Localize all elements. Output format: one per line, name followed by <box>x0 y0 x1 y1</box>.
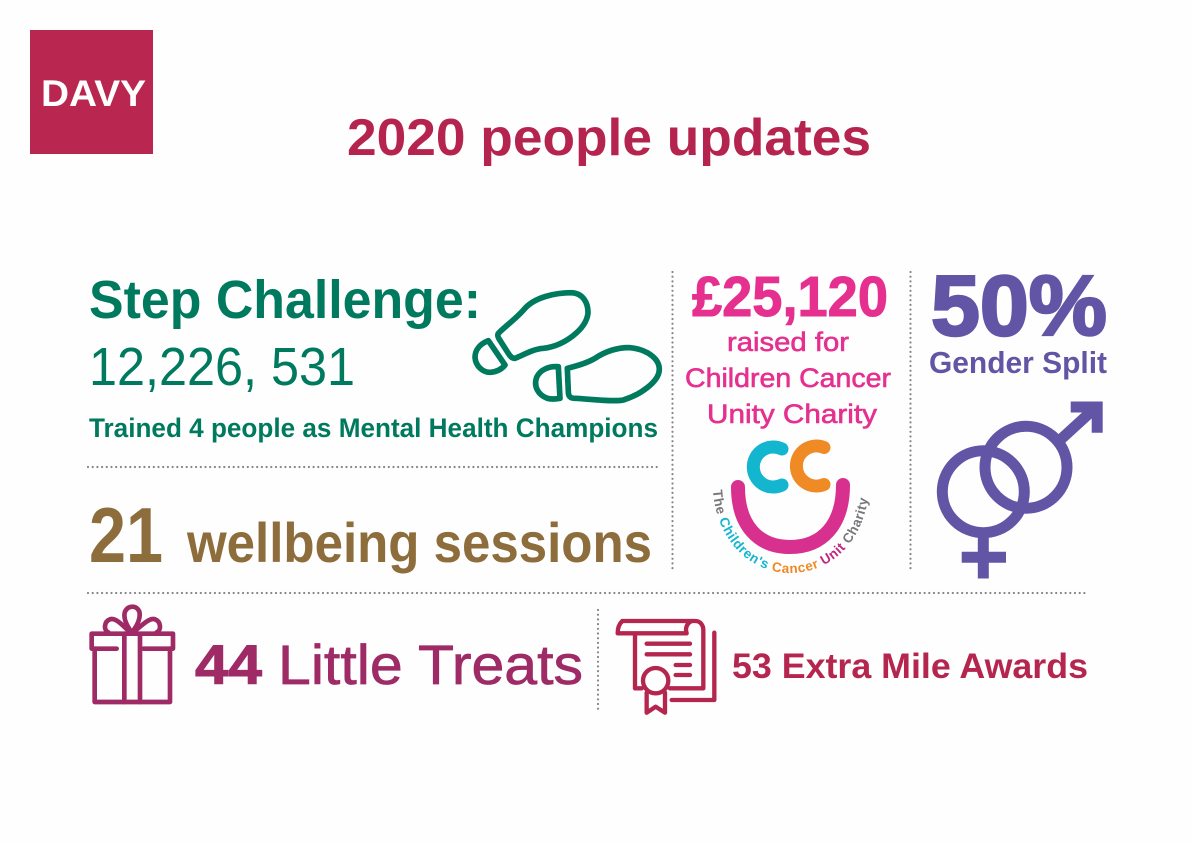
icon: gift box <box>92 607 173 702</box>
logo: children's cancer unit charity: The Children's Cancer Unit Charity <box>713 489 870 574</box>
panel: gender split <box>929 259 1107 380</box>
fifty percent: 50% <box>931 259 1107 354</box>
text: extra mile awards: 53 Extra Mile Awards <box>732 647 1088 686</box>
panel: fundraising <box>685 265 891 429</box>
icon: footprints <box>475 293 659 401</box>
gender split label: Gender Split <box>929 345 1107 380</box>
fundraising description: Unity Charity <box>707 399 878 429</box>
fundraising description: Children Cancer <box>685 363 891 393</box>
text: little treats: Little Treats <box>278 633 583 696</box>
text: wellbeing sessions: wellbeing sessions <box>186 511 652 574</box>
text: wellbeing sessions <box>89 491 652 579</box>
icon: certificate <box>618 621 714 713</box>
logo: children's cancer unit charity <box>713 440 870 574</box>
mental health champions text: Trained 4 people as Mental Health Champions <box>89 413 658 443</box>
heading: Step Challenge: Step Challenge: <box>89 270 481 330</box>
logo: DAVY <box>30 30 153 154</box>
text: little treats: 44 <box>195 633 262 696</box>
panel: step challenge <box>89 270 658 443</box>
icon: gender symbols <box>942 407 1097 578</box>
title: 2020 people updates <box>347 109 871 167</box>
text: wellbeing sessions: 21 <box>89 491 163 579</box>
fundraising description <box>685 327 891 429</box>
step count: 12,226, 531 <box>89 337 355 397</box>
logo: DAVY: DAVY <box>41 73 146 114</box>
fundraising description: raised for <box>727 327 849 357</box>
amount raised: £25,120 <box>692 265 888 329</box>
